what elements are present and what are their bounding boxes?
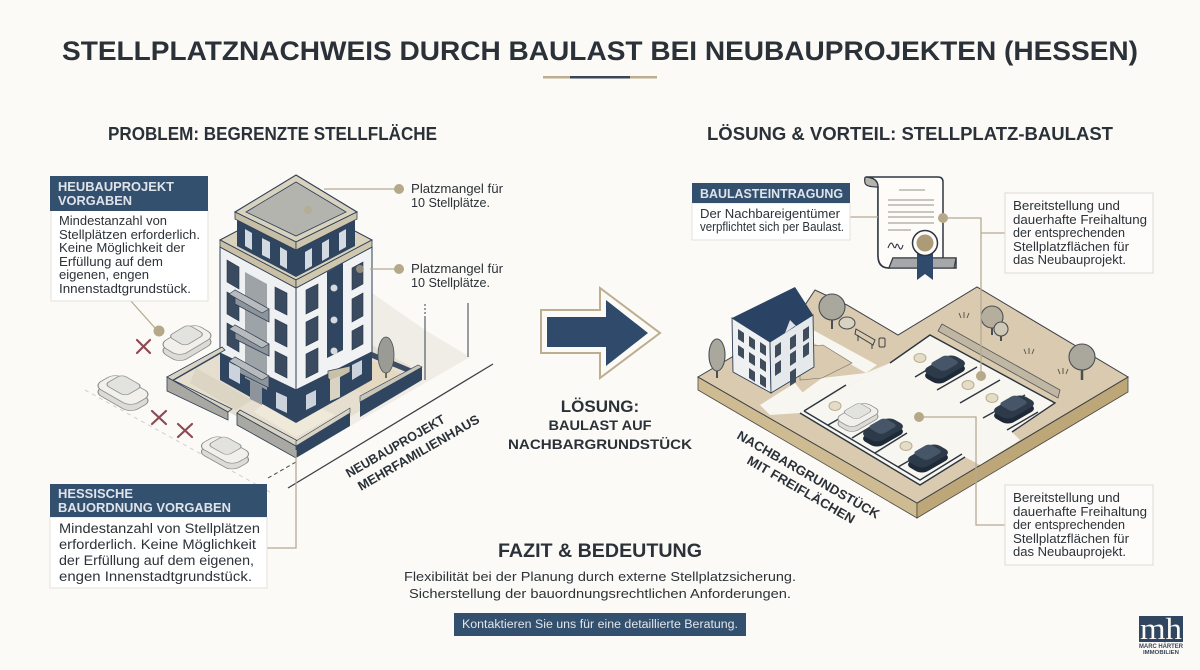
logo: IMMOBILIEN [1143, 650, 1179, 656]
panel: Neubauprojekt Vorgaben: Keine Möglichkeit der [59, 240, 186, 255]
callout: Platzmangel 2: 10 Stellplätze. [411, 275, 490, 290]
panel: Hessische Bauordnung Vorgaben: HESSISCHE [58, 486, 133, 501]
logo: mh [1140, 611, 1183, 646]
callout: Bereitstellung bottom [1005, 485, 1153, 565]
contact button: Kontaktieren Sie uns für eine detaillierte Beratung. [462, 619, 738, 631]
callout: Bereitstellung bottom: Stellplatzflächen für [1013, 531, 1130, 546]
panel: Neubauprojekt Vorgaben: Erfüllung auf dem [59, 254, 163, 269]
trees [709, 294, 1095, 380]
roof [235, 175, 357, 242]
panel: Baulasteintragung: Der Nachbareigentümer [700, 206, 841, 221]
panel: Neubauprojekt Vorgaben: Innenstadtgrundstück. [59, 281, 191, 296]
callout: Platzmangel 2: Platzmangel für [411, 261, 504, 276]
callout: Bereitstellung top: der entsprechenden [1013, 225, 1125, 240]
panel: Hessische Bauordnung Vorgaben: Mindestanzahl von Stellplätzen [59, 521, 260, 536]
heading: problem: PROBLEM: BEGRENZTE STELLFLÄCHE [108, 124, 437, 144]
panel: Hessische Bauordnung Vorgaben: erforderlich. Keine Möglichkeit [59, 537, 256, 552]
conclusion heading: FAZIT & BEDEUTUNG [498, 541, 702, 562]
panel: Hessische Bauordnung Vorgaben: BAUORDNUNG VORGABEN [58, 500, 231, 515]
bench and bin [855, 329, 885, 349]
front walls [167, 377, 228, 420]
solution label: BAULAST AUF [548, 417, 652, 433]
parked cars and crosses [94, 323, 253, 471]
logo: MARC HÄRTER [1139, 643, 1184, 650]
panel: Hessische Bauordnung Vorgaben: der Erfüllung auf dem eigenen, [59, 553, 254, 568]
back walls [167, 347, 222, 380]
callout: Platzmangel 2 [411, 261, 504, 290]
label: Neubauprojekt Mehrfamilienhaus: MEHRFAMILIENHAUS [355, 411, 482, 494]
panel: Neubauprojekt Vorgaben [50, 176, 208, 301]
left face [220, 247, 296, 390]
second rim [220, 200, 372, 280]
conclusion text: Flexibilität bei der Planung durch externe Stellplatzsicherung. [404, 569, 796, 584]
conclusion text [404, 569, 796, 601]
callout: Platzmangel 1: 10 Stellplätze. [411, 195, 490, 210]
panel: Hessische Bauordnung Vorgaben [50, 484, 267, 588]
balcony strip [245, 272, 267, 390]
connector lines right [850, 213, 1005, 525]
heading: solution: LÖSUNG & VORTEIL: STELLPLATZ-BAULAST [707, 124, 1113, 144]
plot floor [167, 345, 422, 450]
base windows and door [229, 362, 240, 384]
label: Neubauprojekt Mehrfamilienhaus: NEUBAUPROJEKT [343, 412, 448, 481]
logo [1139, 611, 1184, 656]
callout: Bereitstellung top: das Neubauprojekt. [1013, 252, 1126, 267]
callout: Bereitstellung top [1005, 193, 1153, 273]
title: STELLPLATZNACHWEIS DURCH BAULAST BEI NEUBAUPROJEKTEN (HESSEN) [62, 36, 1138, 66]
solution label: LÖSUNG: [561, 397, 639, 416]
solution label [508, 397, 692, 452]
panel: Hessische Bauordnung Vorgaben: engen Innenstadtgrundstück. [59, 569, 252, 584]
title underline [543, 76, 657, 78]
contact button [454, 613, 746, 636]
cars [922, 354, 968, 386]
callout: Bereitstellung bottom: das Neubauprojekt. [1013, 544, 1126, 559]
callout: Platzmangel 1 [411, 181, 504, 210]
solution label: NACHBARGRUNDSTÜCK [508, 436, 692, 452]
grass tufts [959, 312, 1068, 374]
callout: Bereitstellung bottom: Bereitstellung und [1013, 490, 1120, 505]
label: Nachbargrundstück mit Freiflächen: NACHBARGRUNDSTÜCK [734, 428, 883, 522]
panel: Baulasteintragung: verpflichtet sich per Baulast. [700, 219, 844, 234]
label: Nachbargrundstück mit Freiflächen: MIT FREIFLÄCHEN [744, 453, 858, 527]
panel: Neubauprojekt Vorgaben: eigenen, engen [59, 267, 149, 282]
small tree [385, 360, 387, 378]
left windows [227, 260, 363, 378]
arrow [541, 288, 660, 378]
paved area [800, 335, 1055, 485]
callout: Bereitstellung top: Bereitstellung und [1013, 198, 1120, 213]
panel: Neubauprojekt Vorgaben: VORGABEN [58, 193, 132, 208]
illustration: neighbouring plot with parking [698, 287, 1128, 518]
connector lines left [130, 184, 404, 548]
callout: Bereitstellung top: dauerhafte Freihaltung [1013, 212, 1147, 227]
panel: Neubauprojekt Vorgaben: HEUBAUPROJEKT [58, 179, 174, 194]
parking markers [829, 354, 998, 450]
right navy strip [327, 263, 343, 358]
callout: Bereitstellung bottom: der entsprechenden [1013, 517, 1125, 532]
callout: Bereitstellung top: Stellplatzflächen für [1013, 239, 1130, 254]
conclusion text: Sicherstellung der bauordnungsrechtlichen Anforderungen. [409, 586, 791, 601]
penthouse [237, 218, 296, 277]
illustration: apartment building on narrow plot [85, 175, 493, 492]
panel: Neubauprojekt Vorgaben: Stellplätzen erforderlich. [59, 227, 200, 242]
callout: Bereitstellung bottom: dauerhafte Freihaltung [1013, 504, 1147, 519]
hedge [938, 324, 1060, 398]
callout: Platzmangel 1: Platzmangel für [411, 181, 504, 196]
icon: certificate with seal [865, 177, 956, 280]
panel: Baulasteintragung: BAULASTEINTRAGUNG [700, 186, 843, 201]
parking outline [890, 335, 1055, 432]
right face [296, 247, 372, 390]
panel: Neubauprojekt Vorgaben: Mindestanzahl von [59, 213, 167, 228]
panel: Baulasteintragung [692, 183, 850, 240]
house [732, 318, 771, 393]
